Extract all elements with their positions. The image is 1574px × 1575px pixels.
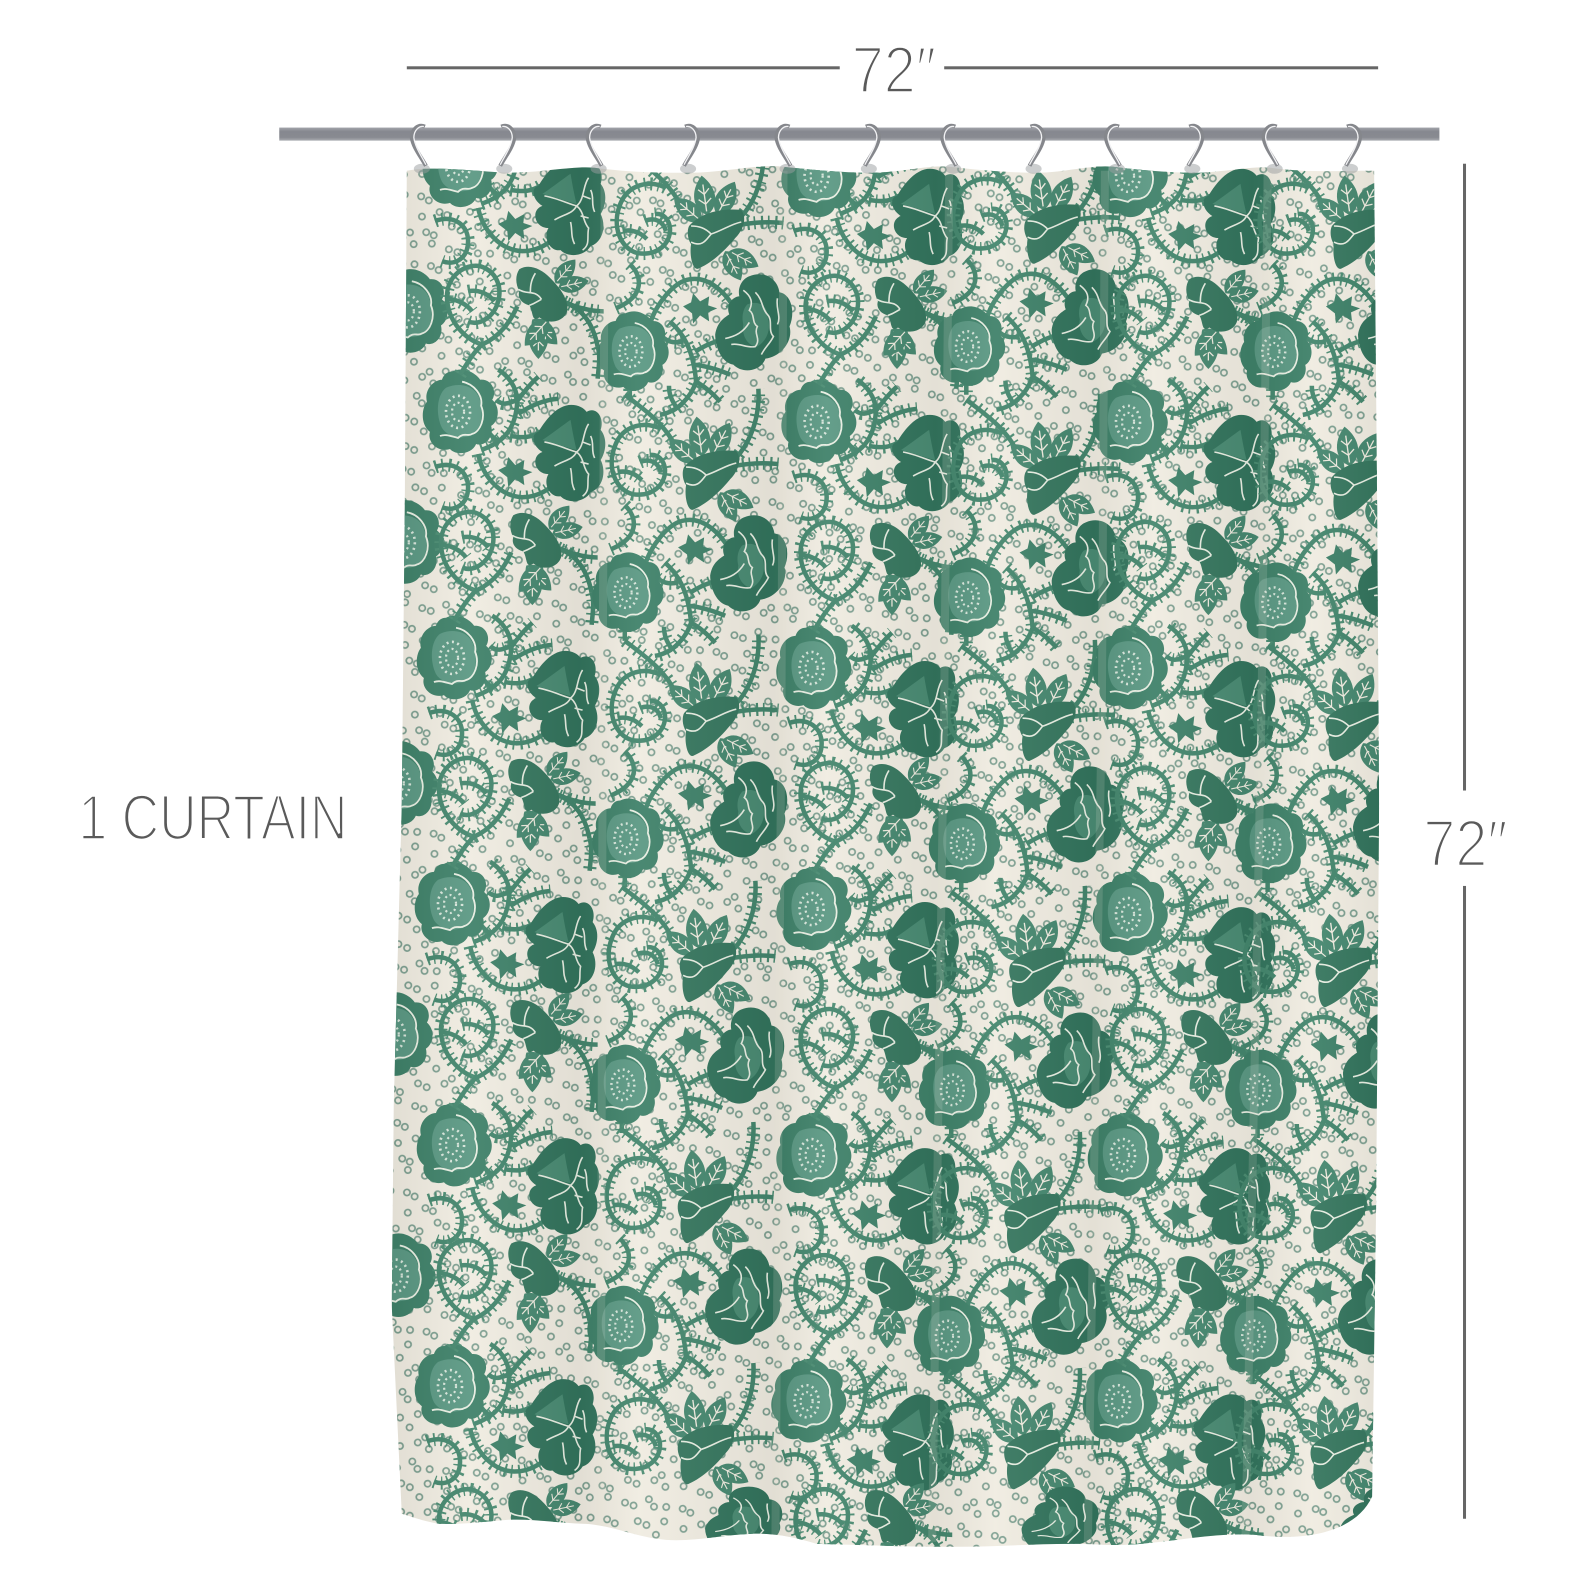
curtain panel [392, 166, 1380, 1547]
shower hooks [412, 126, 1360, 174]
curtain pleat strips [601, 171, 1268, 1542]
curtain rod [279, 128, 1439, 141]
dimension: right height line lower [1463, 886, 1466, 1519]
dimension: top width line right [944, 66, 1378, 69]
dimension: top width line left [407, 66, 840, 69]
label: height 72 inches: 72″ [1423, 807, 1508, 881]
label: width 72 inches: 72″ [852, 33, 936, 107]
floral pattern: column repeats [392, 124, 1380, 1547]
curtain folds shading [382, 151, 1396, 1557]
label: 1 curtain: 1 CURTAIN [78, 782, 348, 854]
dimension: right height line upper [1463, 164, 1466, 791]
